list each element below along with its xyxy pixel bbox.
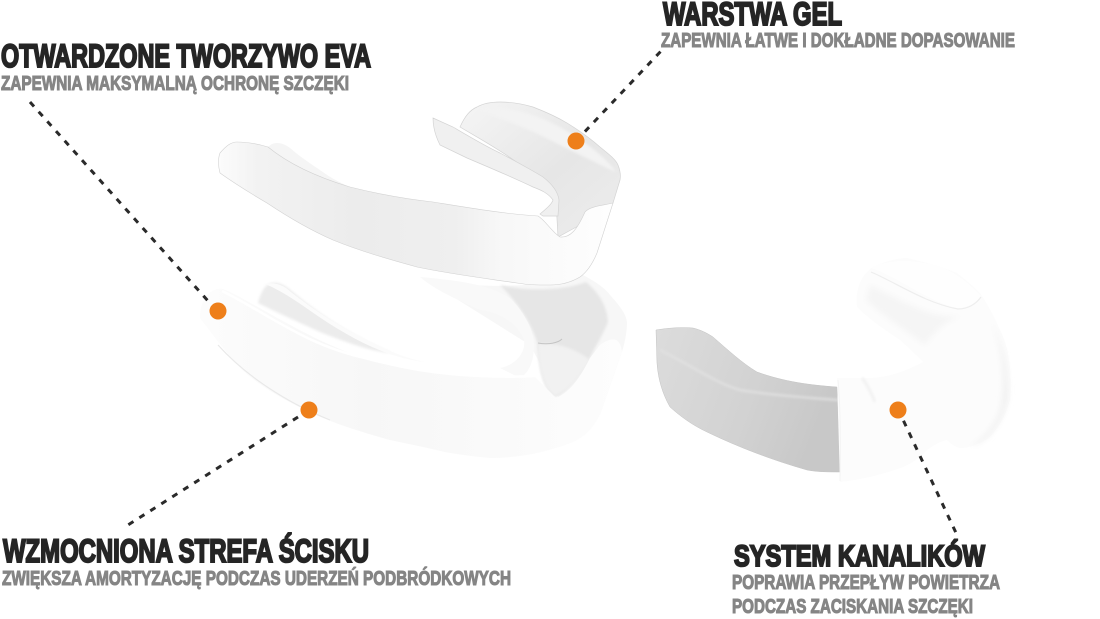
heading: channel system: SYSTEM KANALIKÓW	[734, 539, 986, 573]
text block: gel layer	[661, 0, 1015, 52]
top pad	[871, 261, 981, 308]
dashed leader: channel system	[898, 409, 957, 535]
marker: gel layer	[568, 132, 584, 150]
front band of upper guard	[218, 142, 613, 285]
dashed leader: hardened EVA	[30, 102, 217, 311]
description: compression zone: ZWIĘKSZA AMORTYZACJĘ PODCZAS UDERZEŃ PODBRÓDKOWYCH	[2, 566, 511, 590]
dashed leader: compression zone	[128, 410, 309, 525]
inner hoop of lower guard	[420, 277, 534, 378]
rear wall of upper guard	[433, 118, 559, 216]
cross-section mouthguard illustration	[656, 258, 1011, 482]
grey gel layer	[656, 328, 840, 472]
lower mouthguard illustration	[200, 275, 627, 458]
description line 2: channel system: PODCZAS ZACISKANIA SZCZĘKI	[732, 595, 973, 618]
text block: compression zone	[2, 533, 511, 590]
marker: hardened EVA	[210, 302, 226, 320]
text block: hardened EVA	[1, 38, 371, 95]
heading: compression zone: WZMOCNIONA STREFA ŚCISKU	[3, 533, 369, 569]
buccal edge of upper guard	[268, 143, 350, 187]
marker: channel system	[890, 402, 906, 418]
upper mouthguard illustration	[218, 102, 620, 285]
front band of lower guard	[200, 289, 622, 458]
text block: channel system	[732, 539, 1000, 618]
buccal wall of lower guard	[258, 283, 392, 353]
rim of lower guard	[423, 275, 627, 415]
marker: compression zone	[300, 402, 318, 418]
white shell	[837, 258, 1011, 482]
inner tray of upper guard	[460, 102, 620, 237]
inner tray of lower guard	[500, 282, 608, 397]
description line 1: channel system: POPRAWIA PRZEPŁYW POWIETRZA	[732, 571, 1000, 594]
heading: hardened EVA: OTWARDZONE TWORZYWO EVA	[1, 38, 371, 74]
dashed leader: gel layer	[576, 50, 662, 141]
description: hardened EVA: ZAPEWNIA MAKSYMALNĄ OCHRONĘ SZCZĘKI	[1, 72, 349, 95]
